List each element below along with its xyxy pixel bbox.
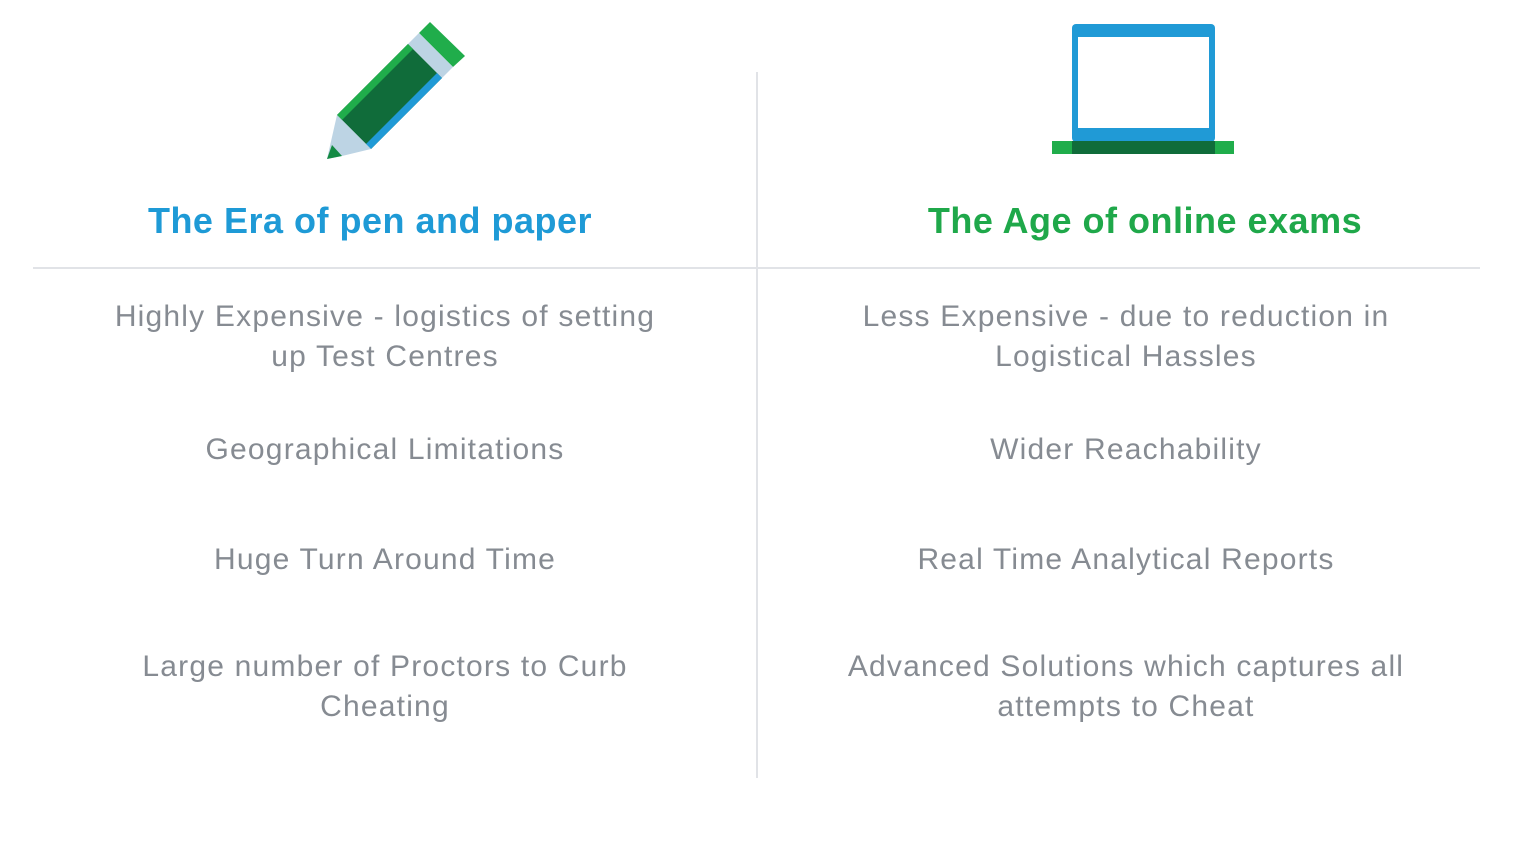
left item 1 — [115, 300, 655, 373]
left item 3: Huge Turn Around Time — [214, 543, 556, 576]
left item 4: Large number of Proctors to Curb — [142, 650, 628, 683]
right item 1 — [863, 300, 1389, 373]
right item 3: Real Time Analytical Reports — [917, 543, 1335, 576]
icon: pencil — [327, 22, 465, 159]
right item 1: Less Expensive - due to reduction in — [863, 300, 1389, 333]
right item 2: Wider Reachability — [990, 433, 1262, 466]
heading: pen and paper: The Era of pen and paper — [148, 200, 592, 241]
left item 2: Geographical Limitations — [206, 433, 564, 466]
right item 4 — [848, 650, 1404, 723]
horizontal divider — [33, 267, 1480, 269]
left item 4: Cheating — [320, 690, 450, 723]
icon: laptop — [1052, 24, 1234, 154]
heading: online exams: The Age of online exams — [928, 200, 1362, 241]
left item 4 — [142, 650, 628, 723]
right item 1: Logistical Hassles — [995, 340, 1257, 373]
left item 1: up Test Centres — [271, 340, 499, 373]
right item 4: Advanced Solutions which captures all — [848, 650, 1404, 683]
left item 1: Highly Expensive - logistics of setting — [115, 300, 655, 333]
right item 4: attempts to Cheat — [997, 690, 1255, 723]
vertical divider — [756, 72, 758, 778]
